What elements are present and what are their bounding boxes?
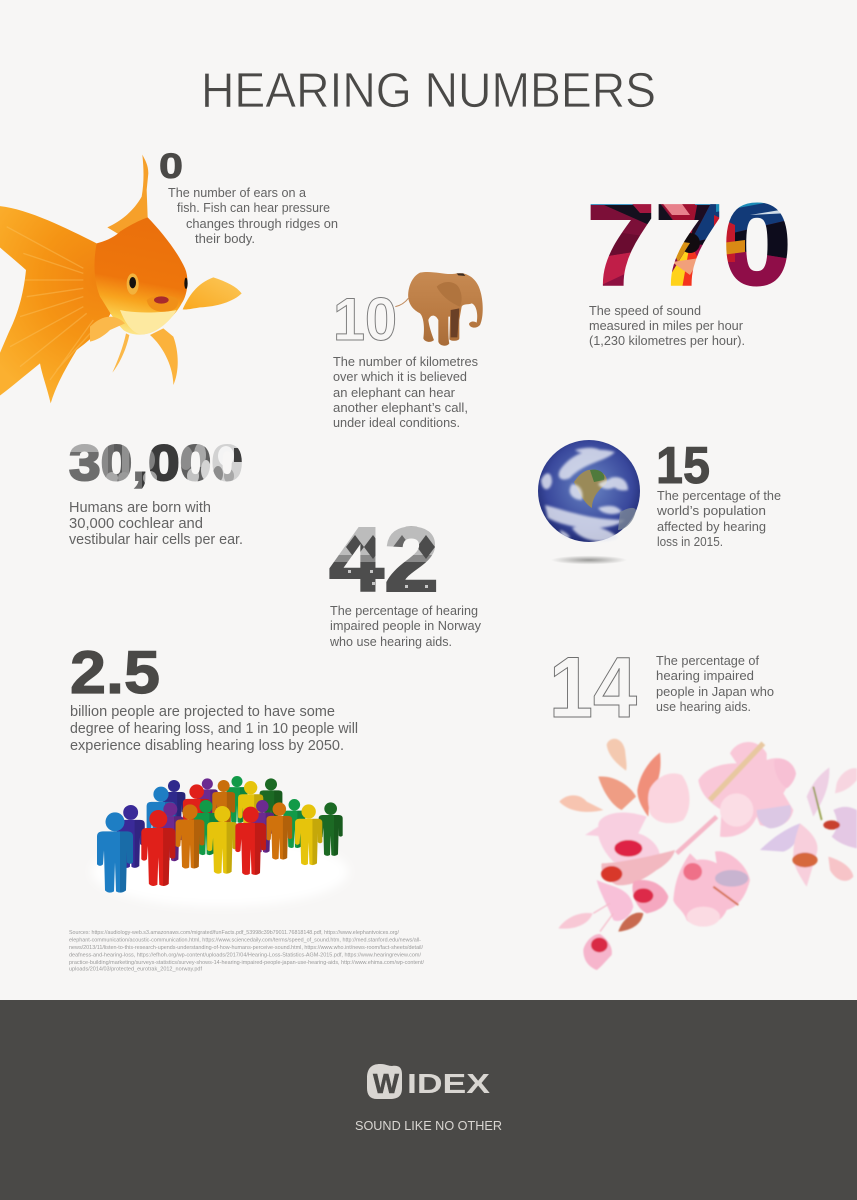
icon: elephant <box>395 272 483 346</box>
number: 770: 770 <box>587 182 791 309</box>
caption: fish <box>168 185 338 246</box>
sources text: practice-building/marketing/surveys-statistics/survey-shows-14-hearing-impaired-people-japan-use-hearing-aids, http://www.ehima.com/wp-content/ <box>69 960 424 966</box>
caption: elephant: an elephant can hear <box>333 385 456 400</box>
number: 10 outline: 10 <box>333 286 397 353</box>
number: 42: 42 <box>329 510 439 611</box>
caption: elephant: over which it is believed <box>333 369 467 384</box>
caption: fish: fish. Fish can hear pressure <box>177 200 330 215</box>
caption: Norway: The percentage of hearing <box>330 603 478 618</box>
caption: Japan: people in Japan who <box>656 684 774 699</box>
caption: speed of sound: measured in miles per hour <box>589 318 744 333</box>
panel: Japan stat <box>549 640 774 736</box>
sources text <box>69 930 424 972</box>
panel: Norway stat <box>329 510 481 649</box>
caption: elephant: another elephant’s call, <box>333 400 468 415</box>
number: 14 outline: 14 <box>549 640 637 736</box>
caption: speed of sound <box>589 303 745 348</box>
sources text: elephant-communication/acoustic-communication.html, https://www.sciencedaily.com/terms/speed_of_sound.htm, http://med.stanford.edu/news/all- <box>69 938 421 944</box>
caption: 2.5 billion: experience disabling hearing loss by 2050. <box>70 738 344 754</box>
title: HEARING NUMBERS <box>201 64 656 118</box>
caption: Norway: impaired people in Norway <box>330 618 481 633</box>
caption: hair cells: 30,000 cochlear and <box>69 516 203 532</box>
panel: 2.5 billion stat <box>70 639 358 907</box>
logo: WIDEX <box>367 1064 490 1099</box>
illustration: cherry blossom branch <box>558 739 857 970</box>
caption: Norway: who use hearing aids. <box>329 634 452 649</box>
caption: fish: their body. <box>195 231 255 246</box>
caption: Japan: use hearing aids. <box>656 699 751 714</box>
caption: Japan <box>656 653 774 714</box>
caption: speed of sound: The speed of sound <box>589 303 701 318</box>
caption: 2.5 billion <box>70 704 358 754</box>
panel: cochlear hair cells stat <box>69 435 243 548</box>
tagline: SOUND LIKE NO OTHER <box>355 1119 502 1133</box>
icon: goldfish <box>0 155 242 403</box>
icon: earth globe <box>538 440 640 564</box>
caption: Norway <box>329 603 481 649</box>
caption: fish: changes through ridges on <box>186 216 338 231</box>
panel: speed of sound stat <box>587 182 791 348</box>
caption: population: The percentage of the <box>657 488 781 503</box>
caption: elephant: The number of kilometres <box>333 354 478 369</box>
sources text: deafness-and-hearing-loss, https://efhoh.org/wp-content/uploads/2017/04/Hearing-Loss-Statistics-AGM-2015.pdf, https://www.hearingreview.com/ <box>69 952 422 958</box>
footer band <box>0 1000 857 1200</box>
caption: hair cells: vestibular hair cells per ear. <box>69 532 243 548</box>
sources text: uploads/2014/03/protected_eurotrak_2012_norway.pdf <box>69 966 203 972</box>
caption: speed of sound: (1,230 kilometres per hour). <box>589 333 745 348</box>
icon: crowd of coloured people <box>92 776 348 907</box>
panel: elephant stat <box>333 272 483 430</box>
caption: 2.5 billion: billion people are projected to have some <box>70 704 335 720</box>
logo: WIDEX: W <box>373 1068 400 1099</box>
number: 15: 15 <box>656 437 710 495</box>
caption: elephant: under ideal conditions. <box>333 415 460 430</box>
caption: fish: The number of ears on a <box>168 185 307 200</box>
caption: hair cells: Humans are born with <box>69 500 211 516</box>
logo: WIDEX: IDEX <box>407 1068 490 1099</box>
caption: Japan: The percentage of <box>656 653 759 668</box>
number: 0: 0 <box>159 147 183 186</box>
caption: population: affected by hearing <box>657 519 766 534</box>
caption: Japan: hearing impaired <box>656 668 754 683</box>
number: 2.5: 2.5 <box>70 639 160 706</box>
sources text: news/2013/11/listen-to-this-research-upends-understanding-of-how-humans-perceive-sound.html, https://www.who.int/news-room/fact-sheets/detail/ <box>69 945 423 951</box>
number: 30,000: 30,000 <box>69 435 243 491</box>
panel: world population stat <box>538 437 781 564</box>
caption: 2.5 billion: degree of hearing loss, and 1 in 10 people will <box>70 721 358 737</box>
caption: elephant <box>333 354 478 430</box>
caption: population: loss in 2015. <box>657 534 723 549</box>
caption: population <box>656 488 781 549</box>
panel: fish stat <box>0 147 338 403</box>
caption: hair cells <box>69 500 243 548</box>
caption: population: world’s population <box>656 503 766 518</box>
sources text: Sources: https://audiology-web.s3.amazonaws.com/migrated/funFacts.pdf_53998c39b79011.76818148.pdf, https://www.elephantvoices.org/ <box>69 930 399 936</box>
